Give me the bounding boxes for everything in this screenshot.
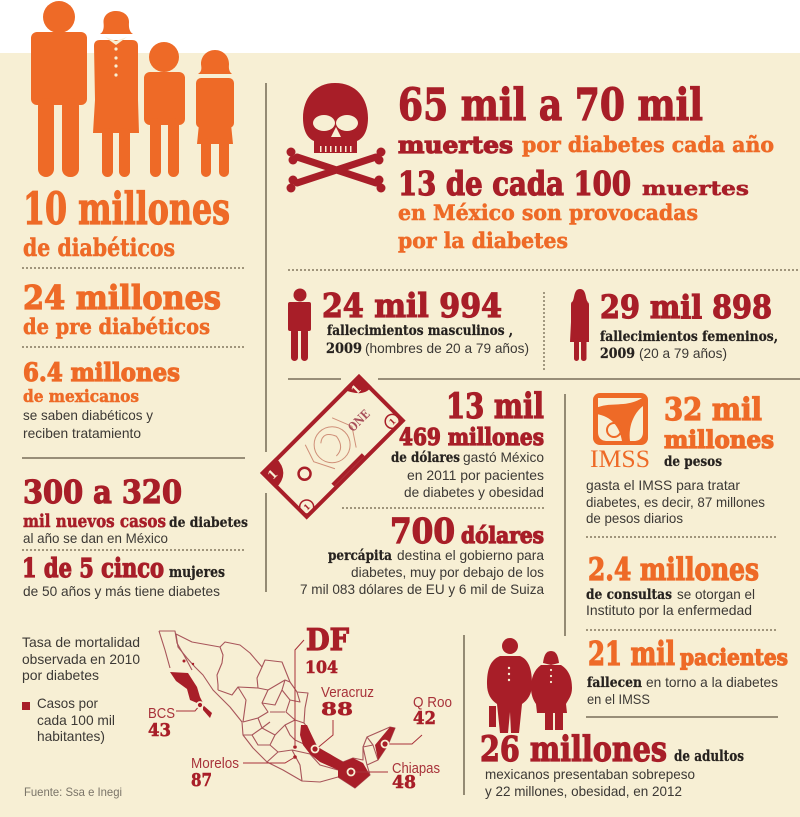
stat: 1 de 5 cinco mujeres: de 50 años y más tiene diabetes	[23, 583, 220, 599]
headline: muertes por diabetes: muertes	[642, 176, 749, 200]
stat: fallecimientos femeninos: fallecimientos femeninos,	[600, 329, 778, 345]
stat: fallecimientos masculinos	[322, 286, 529, 357]
stat: 10 millones de diabéticos: 10 millones	[23, 184, 230, 235]
stat: 1 de 5 cinco mujeres	[22, 554, 225, 599]
stat: 26 millones de adultos: 26 millones	[480, 729, 667, 770]
map legend: tasa de mortalidad: observada en 2010	[22, 651, 140, 667]
map legend: tasa de mortalidad	[22, 634, 140, 744]
stat: 21 mil pacientes: pacientes	[680, 645, 788, 671]
stat: 300 a 320 mil nuevos casos: al año se dan en México	[23, 530, 168, 546]
stat: 300 a 320 mil nuevos casos: de diabetes	[169, 515, 248, 531]
stat: 6.4 millones de mexicanos: de mexicanos	[23, 387, 139, 407]
stat: fallecimientos femeninos	[600, 288, 778, 362]
stat: 26 millones de adultos: y 22 millones, obesidad, en 2012	[485, 783, 682, 799]
headline: muertes por diabetes: muertes	[398, 132, 513, 159]
map label: DF	[305, 623, 349, 678]
map label: BCS: 43	[148, 720, 171, 741]
stat: 21 mil pacientes	[587, 634, 788, 707]
map label: BCS	[148, 705, 175, 741]
stat: 10 millones de diabéticos: de diabéticos	[23, 233, 175, 262]
map label: Q Roo: 42	[413, 708, 436, 729]
map label: DF: 104	[305, 658, 338, 678]
stat: 700 dólares percápita: 7 mil 083 dólares de EU y 6 mil de Suiza	[300, 581, 544, 597]
stat: 32 mil millones de pesos: 32 mil	[664, 392, 762, 428]
stat: 700 dólares percápita: diabetes, muy por debajo de los	[351, 564, 544, 580]
stat: 21 mil pacientes: 21 mil	[588, 634, 675, 673]
stat: fallecimientos masculinos: fallecimientos masculinos ,	[327, 323, 513, 339]
map label: Q Roo: Q Roo	[413, 694, 452, 711]
map label: Veracruz: 88	[321, 699, 353, 720]
map legend: tasa de mortalidad: Casos por	[37, 695, 98, 711]
headline: muertes por diabetes: en México son provocadas	[398, 200, 698, 225]
stat: 13 mil 469 millones de dólares: 469 millones	[399, 424, 544, 451]
stat: 300 a 320 mil nuevos casos: mil nuevos casos	[23, 511, 166, 532]
icon: IMSS logo: IMSS	[590, 446, 650, 473]
stat: 26 millones de adultos	[480, 729, 744, 799]
stat: 300 a 320 mil nuevos casos: 300 a 320	[23, 473, 182, 511]
icon: man	[288, 288, 311, 361]
map of Mexico	[159, 631, 422, 788]
stat: 10 millones de diabéticos	[23, 184, 230, 262]
stat: 700 dólares percápita: percápita	[328, 548, 392, 564]
stat: 13 mil 469 millones de dólares: de dólares	[391, 450, 460, 466]
stat: 2.4 millones de consultas: 2.4 millones	[588, 552, 759, 588]
icon: dollar bill: 1	[348, 382, 364, 397]
stat: 2.4 millones de consultas: Instituto por la enfermedad	[586, 602, 752, 618]
stat: 32 mil millones de pesos: millones	[664, 425, 774, 454]
map label: DF: DF	[306, 623, 349, 658]
stat: 26 millones de adultos: de adultos	[674, 747, 744, 765]
stat: 1 de 5 cinco mujeres: mujeres	[169, 563, 225, 581]
map label: Morelos	[191, 755, 239, 791]
headline: muertes por diabetes: 13 de cada 100	[398, 164, 631, 203]
stat: 24 millones de pre diabéticos: 24 millones	[23, 278, 221, 317]
stat: fallecimientos femeninos: 29 mil 898	[600, 288, 772, 326]
stat: 2.4 millones de consultas: se otorgan el	[677, 586, 755, 602]
icon: dollar bill	[260, 374, 404, 518]
icon: dollar bill: 1	[265, 467, 281, 482]
stat: fallecimientos femeninos: 2009	[600, 346, 635, 362]
stat: 21 mil pacientes: en el IMSS	[587, 691, 650, 707]
icon: IMSS logo	[590, 393, 650, 473]
stat: 700 dólares percápita: dólares	[461, 523, 544, 549]
stat: fallecimientos femeninos: (20 a 79 años)	[639, 345, 727, 361]
stat: 21 mil pacientes: fallecen	[587, 675, 642, 691]
map legend: tasa de mortalidad: cada 100 mil	[37, 712, 115, 728]
icon: family of four	[31, 1, 234, 177]
stat: 6.4 millones de mexicanos: se saben diabéticos y	[23, 407, 153, 423]
icon: woman	[570, 289, 589, 361]
icon: dollar bill: ONE	[345, 407, 373, 434]
map label: Chiapas: Chiapas	[392, 760, 440, 777]
stat: 6.4 millones de mexicanos: 6.4 millones	[23, 358, 180, 387]
stat: 24 millones de pre diabéticos: de pre diabéticos	[23, 314, 210, 339]
map label: BCS: BCS	[148, 705, 175, 722]
map legend: tasa de mortalidad: por diabetes	[22, 667, 99, 683]
stat: 21 mil pacientes: en torno a la diabetes	[646, 674, 778, 690]
stat: 32 mil millones de pesos: diabetes, es decir, 87 millones	[586, 494, 765, 510]
map label: Morelos: 87	[191, 770, 212, 791]
icon: skull and crossbones	[286, 83, 386, 192]
map label: Chiapas	[392, 760, 440, 793]
stat: 700 dólares percápita: destina el gobierno para	[397, 547, 544, 563]
icon: overweight couple	[487, 638, 572, 733]
stat: 13 mil 469 millones de dólares: gastó México	[463, 449, 544, 465]
stat: 13 mil 469 millones de dólares: de diabetes y obesidad	[404, 484, 544, 500]
map label: Chiapas: 48	[392, 772, 416, 793]
map label: Veracruz	[321, 684, 374, 720]
headline: muertes por diabetes	[398, 80, 774, 253]
map legend: tasa de mortalidad: Tasa de mortalidad	[22, 634, 140, 650]
stat: 32 mil millones de pesos: gasta el IMSS para tratar	[586, 477, 740, 493]
map legend: tasa de mortalidad: habitantes)	[37, 728, 105, 744]
map label: Veracruz: Veracruz	[321, 684, 374, 701]
stat: 32 mil millones de pesos	[586, 392, 774, 526]
icon: dollar bill: 1	[387, 416, 398, 427]
stat: 700 dólares percápita	[300, 511, 544, 597]
headline: muertes por diabetes: por diabetes cada año	[522, 132, 774, 157]
stat: 2.4 millones de consultas: de consultas	[586, 587, 672, 603]
stat: fallecimientos masculinos: 2009	[326, 341, 362, 357]
stat: 32 mil millones de pesos: de pesos diarios	[586, 510, 683, 526]
stat: 13 mil 469 millones de dólares	[391, 386, 544, 500]
stat: 300 a 320 mil nuevos casos	[23, 473, 248, 546]
source note: Fuente: Ssa e Inegi	[24, 785, 122, 799]
map label: Morelos: Morelos	[191, 755, 239, 772]
stat: 1 de 5 cinco mujeres: 1 de 5 cinco	[22, 554, 164, 584]
stat: 6.4 millones de mexicanos	[23, 358, 180, 441]
stat: 6.4 millones de mexicanos: reciben tratamiento	[23, 425, 141, 441]
stat: 24 millones de pre diabéticos	[23, 278, 221, 339]
stat: 13 mil 469 millones de dólares: en 2011 por pacientes	[407, 467, 544, 483]
stat: 700 dólares percápita: 700	[390, 511, 455, 552]
map label: Q Roo	[413, 694, 452, 729]
stat: fallecimientos masculinos: (hombres de 20 a 79 años)	[365, 340, 529, 356]
stat: 2.4 millones de consultas	[586, 552, 759, 618]
stat: fallecimientos masculinos: 24 mil 994	[322, 286, 502, 325]
stat: 26 millones de adultos: mexicanos presentaban sobrepeso	[485, 766, 695, 782]
icon: dollar bill: 1	[301, 501, 312, 512]
stat: 13 mil 469 millones de dólares: 13 mil	[446, 386, 544, 427]
headline: muertes por diabetes: 65 mil a 70 mil	[398, 80, 703, 131]
stat: 32 mil millones de pesos: de pesos	[664, 454, 722, 470]
headline: muertes por diabetes: por la diabetes	[398, 228, 568, 253]
